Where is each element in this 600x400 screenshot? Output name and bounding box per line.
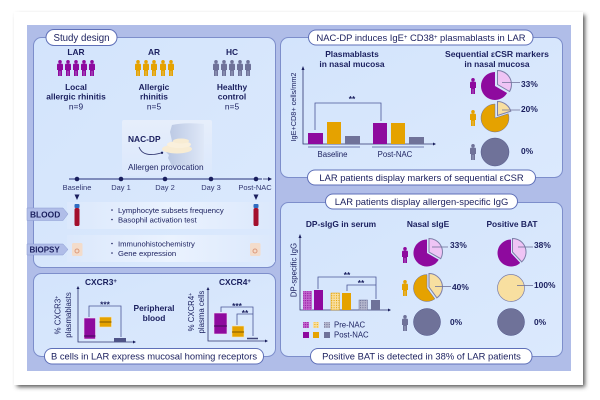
pie: HC 0%: 0% [534, 317, 547, 327]
panel: homing receptors [34, 274, 276, 364]
icon: nasal allergen cloud [162, 138, 192, 154]
chart: CXCR4: % CXCR4 [187, 296, 196, 331]
group: LAR: n=9 [69, 102, 83, 112]
group: LAR: LAR [67, 47, 85, 57]
icon: biopsy cup post-NAC [250, 243, 260, 256]
chart: CXCR3: + [54, 296, 60, 299]
chart: CXCR4: *** [232, 301, 243, 311]
group: AR: AR [148, 47, 160, 57]
chart: DP-sIgG in serum: ** [358, 278, 365, 288]
heading pill [308, 30, 533, 45]
chart: DP-sIgG in serum: ** [344, 270, 351, 280]
chart: nasal sIgE pies: Nasal sIgE [407, 219, 450, 229]
conclusion pill [308, 170, 536, 185]
timeline: Day 1 [111, 183, 131, 192]
heading pill [326, 194, 518, 209]
chart: DP-sIgG in serum: DP-sIgG in serum [306, 219, 376, 229]
group: HC: HC [226, 47, 238, 57]
heading pill: plasmablasts in LAR [437, 32, 526, 43]
icon: blood tube post-NAC [254, 204, 258, 226]
text: biopsy tests [111, 240, 195, 258]
pie: LAR 38%: 38% [534, 240, 551, 250]
panel: study design [27, 30, 276, 268]
legend [303, 320, 369, 340]
chart: positive BAT pies: Positive BAT [486, 219, 538, 229]
tag: biopsy: BIOPSY [30, 246, 60, 254]
label: peripheral blood: blood [143, 313, 165, 323]
pie: LAR 33%: 33% [521, 79, 538, 89]
group: LAR: Local [65, 82, 87, 92]
heading pill: LAR patients display allergen-specific IgG [335, 196, 508, 207]
timeline: Baseline [63, 183, 91, 192]
tag: blood [27, 208, 68, 220]
icon: biopsy cup baseline [72, 243, 82, 256]
timeline [63, 177, 272, 200]
chart: CXCR4: CXCR4 [219, 277, 247, 287]
text: blood tests: Basophil activation test [118, 216, 197, 224]
group: LAR: allergic rhinitis [46, 92, 106, 102]
heading pill: NAC-DP induces IgE [316, 32, 404, 43]
text: blood tests [111, 206, 224, 224]
conclusion pill [310, 348, 532, 364]
chart: CXCR3: *** [100, 300, 111, 310]
conclusion pill: LAR patients display markers of sequential εCSR [319, 172, 524, 183]
group: AR: Allergic [139, 82, 170, 92]
heading: study design: Study design [53, 33, 110, 44]
timeline: Post-NAC [238, 183, 272, 192]
panel: plasmablasts [280, 30, 562, 185]
chart: CXCR3 [54, 277, 136, 344]
chart: plasmablasts: ** [349, 94, 356, 104]
label: peripheral blood [134, 303, 174, 323]
blood row [27, 202, 275, 229]
blue background [27, 25, 571, 371]
chart: positive BAT pies [486, 219, 556, 336]
icon: blood tube baseline [74, 204, 80, 226]
pie: HC 0%: 0% [521, 146, 534, 156]
label: peripheral blood: Peripheral [134, 303, 174, 313]
pie: AR 100%: 100% [534, 280, 556, 290]
group: HC: Healthy [217, 82, 247, 92]
text: biopsy tests: Gene expression [118, 249, 176, 258]
group: HC: control [218, 92, 246, 102]
heading pill: CD38 [407, 32, 434, 43]
pie: AR 20%: 20% [521, 104, 538, 114]
legend: Post-NAC [334, 330, 369, 340]
group: HC [213, 47, 251, 112]
allergen provocation illustration: Allergen provocation [128, 162, 204, 172]
chart: CXCR4: ** [242, 308, 249, 318]
chart: DP-sIgG in serum: DP-specific IgG [290, 243, 298, 297]
pie: HC 0%: 0% [450, 317, 463, 327]
group: LAR [46, 47, 106, 112]
text: blood tests: Lymphocyte subsets frequency [118, 206, 224, 215]
group: HC: n=5 [225, 102, 239, 112]
chart: nasal sIgE pies [402, 219, 469, 336]
chart: CXCR3: plasmablasts [64, 292, 73, 338]
chart: plasmablasts: Post-NAC [378, 150, 413, 159]
pie: AR 40%: 40% [452, 282, 469, 292]
chart: CXCR3: + [113, 279, 117, 285]
text: biopsy tests: Immunohistochemistry [118, 240, 195, 248]
chart: CXCR4: + [247, 279, 251, 285]
chart: DP-sIgG in serum [290, 219, 391, 340]
chart: plasmablasts: IgE+CD8+ cells/mm2 [289, 73, 298, 141]
conclusion pill: Positive BAT is detected in 38% of LAR patients [322, 350, 521, 362]
chart: plasmablasts: Baseline [318, 150, 347, 159]
chart: CXCR4 [187, 277, 268, 342]
chart: CXCR3: % CXCR3 [54, 299, 62, 334]
group: AR: n=5 [147, 102, 161, 112]
biopsy row [27, 235, 275, 262]
timeline: Day 2 [155, 183, 175, 192]
chart: plasmablasts: Plasmablasts [325, 49, 379, 59]
pie: LAR 33%: 33% [450, 240, 467, 250]
group: AR [135, 47, 174, 112]
icon: head profile [166, 123, 204, 166]
legend: Pre-NAC [334, 320, 366, 330]
chart: plasmablasts [289, 49, 436, 159]
timeline: Day 3 [201, 183, 221, 192]
conclusion pill [44, 348, 264, 364]
chart: sequential CSR pies: Sequential εCSR markers [445, 49, 549, 59]
heading pill: + [434, 35, 438, 41]
arrow: nasal delivery [139, 147, 161, 155]
heading pill: + [404, 35, 408, 41]
chart: sequential CSR pies [445, 49, 549, 166]
chart: CXCR4: + [188, 293, 194, 296]
chart: plasmablasts: in nasal mucosa [319, 59, 385, 69]
group: AR: rhinitis [140, 92, 168, 102]
panel: allergen-specific IgG [280, 194, 562, 364]
allergen provocation illustration [122, 120, 212, 176]
chart: sequential CSR pies: in nasal mucosa [464, 59, 530, 69]
heading: study design [46, 30, 117, 46]
chart: CXCR4: plasma cells [197, 290, 206, 333]
allergen provocation illustration: NAC-DP [128, 134, 161, 144]
chart: CXCR3: CXCR3 [85, 277, 113, 287]
conclusion pill: B cells in LAR express mucosal homing receptors [51, 350, 257, 362]
tag: blood: BLOOD [30, 210, 60, 220]
tag: biopsy [27, 244, 68, 255]
